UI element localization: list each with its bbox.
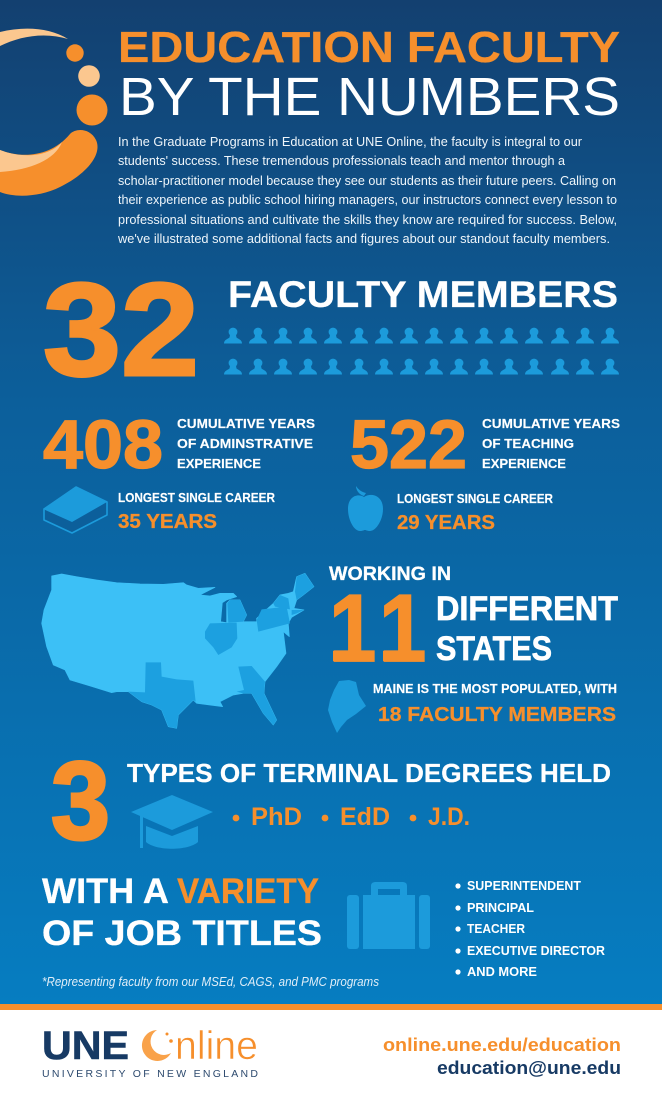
list: job titles: TEACHER	[467, 922, 525, 936]
icon: graduation cap	[131, 795, 213, 849]
list: degrees: EdD	[340, 803, 390, 831]
text: administrative experience: EXPERIENCE	[177, 457, 261, 471]
intro paragraph	[117, 135, 617, 246]
heading: different states: DIFFERENT	[436, 590, 618, 628]
logo: UNE Online	[42, 1024, 258, 1080]
contact details: online.une.edu/education	[383, 1034, 621, 1055]
list: degrees: J.D.	[428, 803, 470, 831]
heading: variety of job titles: VARIETY	[177, 872, 319, 911]
intro paragraph: professional situations and cultivate the skills they know are required for success. Below,	[118, 213, 617, 227]
list: degrees: PhD	[251, 803, 302, 831]
heading: terminal degrees: TYPES OF TERMINAL DEGREES HELD	[127, 758, 611, 788]
text: working in: WORKING IN	[329, 564, 451, 585]
heading: variety of job titles: WITH A	[42, 872, 169, 911]
stat: 522: 522	[350, 406, 467, 483]
icon: briefcase	[347, 882, 430, 949]
contact details: education@une.edu	[437, 1057, 621, 1078]
icon: book	[43, 487, 107, 533]
logo swirl graphic	[0, 29, 108, 196]
text: administrative experience	[177, 417, 315, 471]
intro paragraph: In the Graduate Programs in Education at UNE Online, the faculty is integral to our	[118, 135, 582, 149]
heading: variety of job titles: OF JOB TITLES	[42, 914, 322, 953]
text: Maine callout	[373, 682, 617, 726]
stat: 11: 11	[329, 576, 426, 682]
footnote: *Representing faculty from our MSEd, CAGS, and PMC programs	[42, 975, 379, 989]
icons: 32 people	[224, 328, 619, 374]
heading: different states	[436, 590, 618, 668]
intro paragraph: scholar-practitioner model because they see our students as their future peers. Calling on	[118, 174, 616, 188]
text: longest career 35 years: LONGEST SINGLE CAREER	[118, 491, 275, 505]
stat: 408: 408	[43, 406, 163, 483]
intro paragraph: we've illustrated some additional facts and figures about our standout faculty members.	[117, 232, 610, 246]
stat: 3: 3	[51, 740, 110, 863]
logo: UNE Online: UNE	[42, 1024, 129, 1068]
intro paragraph: their experience as public school hiring managers, our instructors connect every lesson to	[118, 193, 617, 207]
text: longest career 29 years: 29 YEARS	[397, 512, 495, 534]
logo: UNE Online: nline	[175, 1024, 258, 1068]
text: longest career 29 years: LONGEST SINGLE CAREER	[397, 492, 553, 506]
intro paragraph: students' success. These tremendous professionals teach and mentor through a	[118, 154, 565, 168]
text: administrative experience: CUMULATIVE YEARS	[177, 417, 315, 431]
title: EDUCATION FACULTY	[118, 23, 620, 72]
map: United States	[42, 573, 314, 728]
icon: Maine	[328, 680, 366, 733]
contact details	[383, 1034, 621, 1078]
list: job titles: EXECUTIVE DIRECTOR	[467, 944, 605, 958]
text: longest career 35 years	[118, 491, 275, 533]
heading: variety of job titles	[42, 872, 322, 953]
list: job titles: SUPERINTENDENT	[467, 879, 581, 893]
footer panel	[0, 1004, 662, 1103]
list: job titles	[455, 879, 605, 979]
text: Maine callout: MAINE IS THE MOST POPULATED, WITH	[373, 682, 617, 696]
text: longest career 29 years	[397, 492, 553, 534]
text: teaching experience: EXPERIENCE	[482, 457, 566, 471]
text: teaching experience	[482, 417, 620, 471]
text: teaching experience: CUMULATIVE YEARS	[482, 417, 620, 431]
text: administrative experience: OF ADMINSTRATIVE	[177, 437, 313, 451]
text: teaching experience: OF TEACHING	[482, 437, 574, 451]
list: degrees	[233, 803, 470, 831]
icon: apple	[348, 486, 383, 531]
stat: 32: 32	[43, 256, 199, 403]
heading: different states: STATES	[436, 630, 552, 668]
title: BY THE NUMBERS	[119, 67, 620, 127]
title	[118, 23, 620, 127]
logo: UNE Online: UNIVERSITY OF NEW ENGLAND	[42, 1068, 258, 1080]
text: longest career 35 years: 35 YEARS	[118, 511, 217, 533]
list: job titles: AND MORE	[467, 965, 537, 979]
heading: faculty members: FACULTY MEMBERS	[228, 274, 618, 315]
list: job titles: PRINCIPAL	[467, 901, 534, 915]
text: Maine callout: 18 FACULTY MEMBERS	[378, 703, 616, 726]
